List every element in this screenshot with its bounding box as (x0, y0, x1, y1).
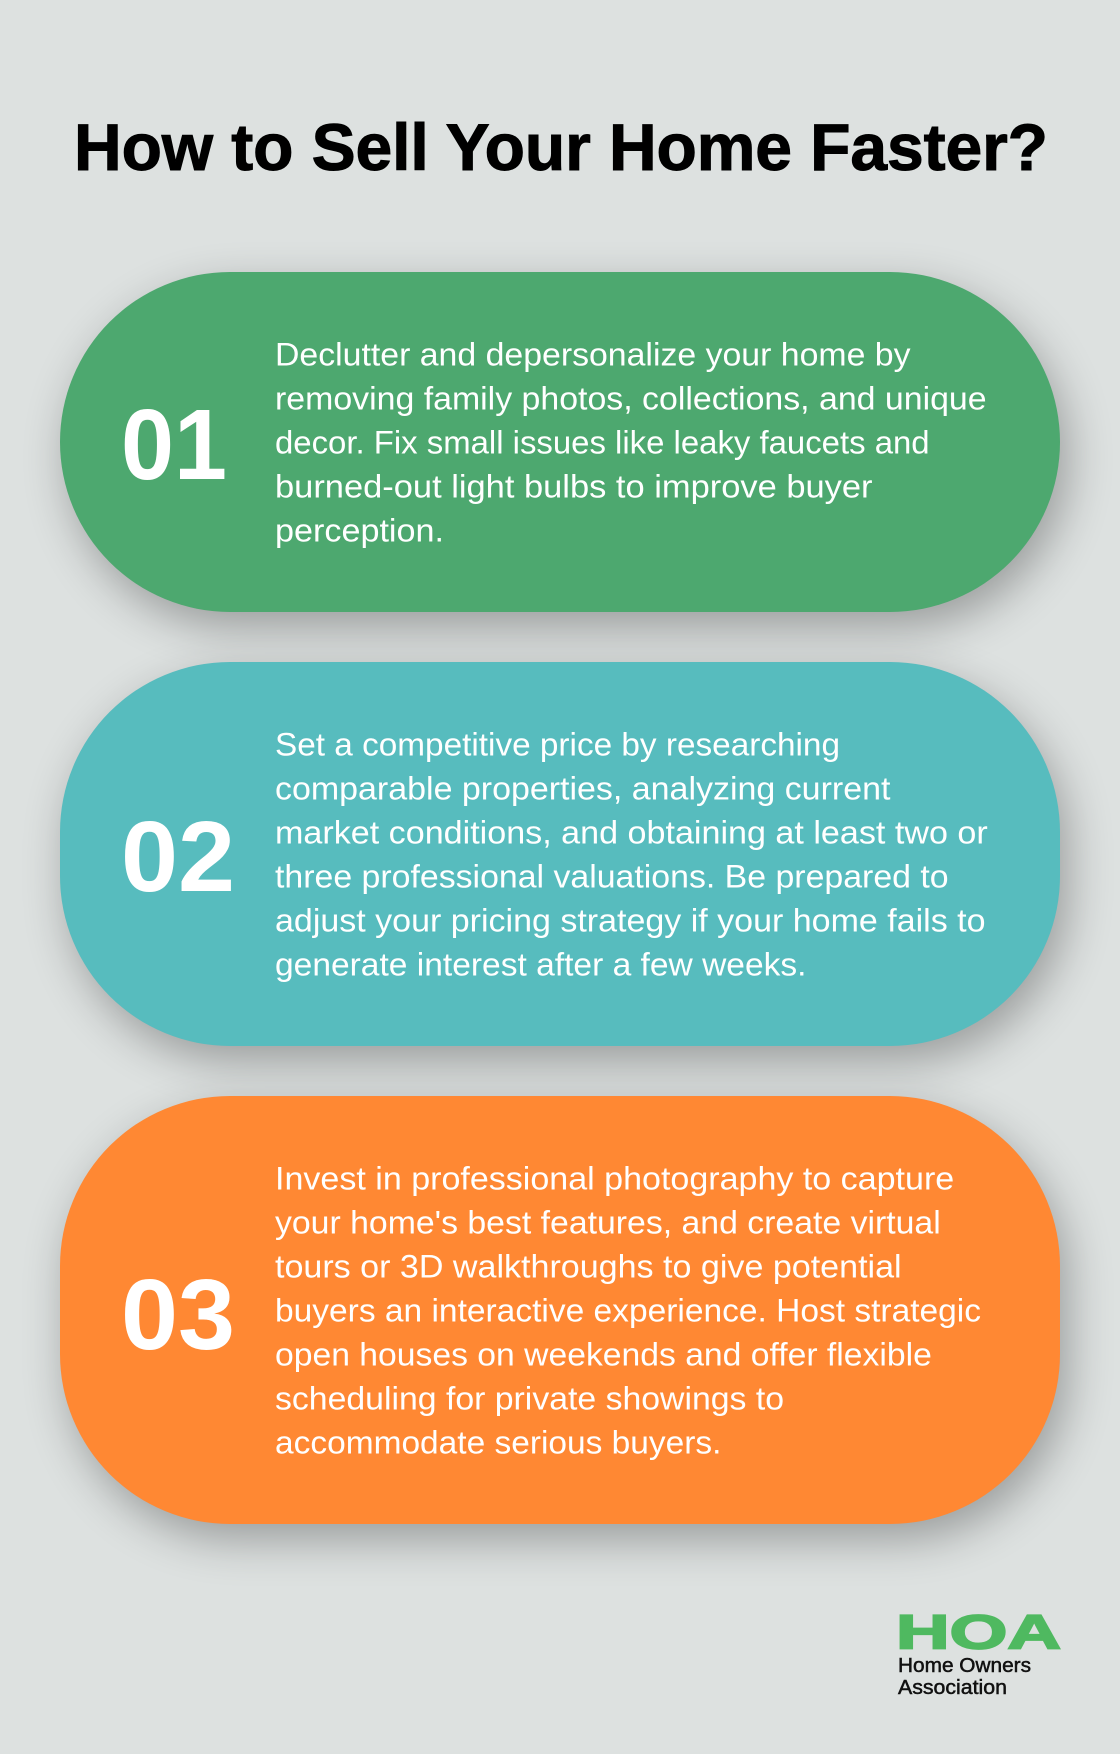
logo: HOA Home Owners Association: Home Owners (898, 1655, 1031, 1677)
text block: declutter: perception. (275, 512, 444, 548)
text block: pricing: comparable properties, analyzing current (275, 770, 891, 806)
text block: pricing: market conditions, and obtaining at least two or (275, 814, 988, 850)
logo: HOA Home Owners Association (896, 1606, 1061, 1699)
text block: declutter (275, 336, 987, 548)
text block: marketing: buyers an interactive experience. Host strategic (275, 1292, 981, 1328)
text block: declutter: removing family photos, collections, and unique (275, 380, 987, 416)
text block: pricing: generate interest after a few weeks. (275, 946, 806, 982)
text block: marketing: tours or 3D walkthroughs to give potential (275, 1248, 902, 1284)
panel: step 03 (60, 1096, 1060, 1524)
text block: pricing: Set a competitive price by researching (275, 726, 840, 762)
text block: marketing: Invest in professional photography to capture (275, 1160, 954, 1196)
panel: step 02 (60, 662, 1060, 1046)
text block: pricing: adjust your pricing strategy if your home fails to (275, 902, 986, 938)
panel: step 01 (60, 272, 1060, 612)
number 01: 01 (121, 389, 227, 501)
text block: pricing (275, 726, 988, 982)
text block: marketing: open houses on weekends and offer flexible (275, 1336, 932, 1372)
logo: HOA Home Owners Association: HOA (896, 1606, 1061, 1660)
text block: marketing: your home's best features, and create virtual (275, 1204, 941, 1240)
number 03: 03 (121, 1259, 235, 1371)
text block: pricing: three professional valuations. Be prepared to (275, 858, 949, 894)
text block: marketing: scheduling for private showings to (275, 1380, 784, 1416)
title: How to Sell Your Home Faster? (74, 110, 1048, 184)
text block: declutter: burned-out light bulbs to improve buyer (275, 468, 873, 504)
text block: declutter: Declutter and depersonalize your home by (275, 336, 910, 372)
number 02: 02 (121, 801, 235, 913)
text block: declutter: decor. Fix small issues like leaky faucets and (275, 424, 930, 460)
text block: marketing (275, 1160, 981, 1460)
text block: marketing: accommodate serious buyers. (275, 1424, 721, 1460)
logo: HOA Home Owners Association: Association (898, 1677, 1007, 1699)
